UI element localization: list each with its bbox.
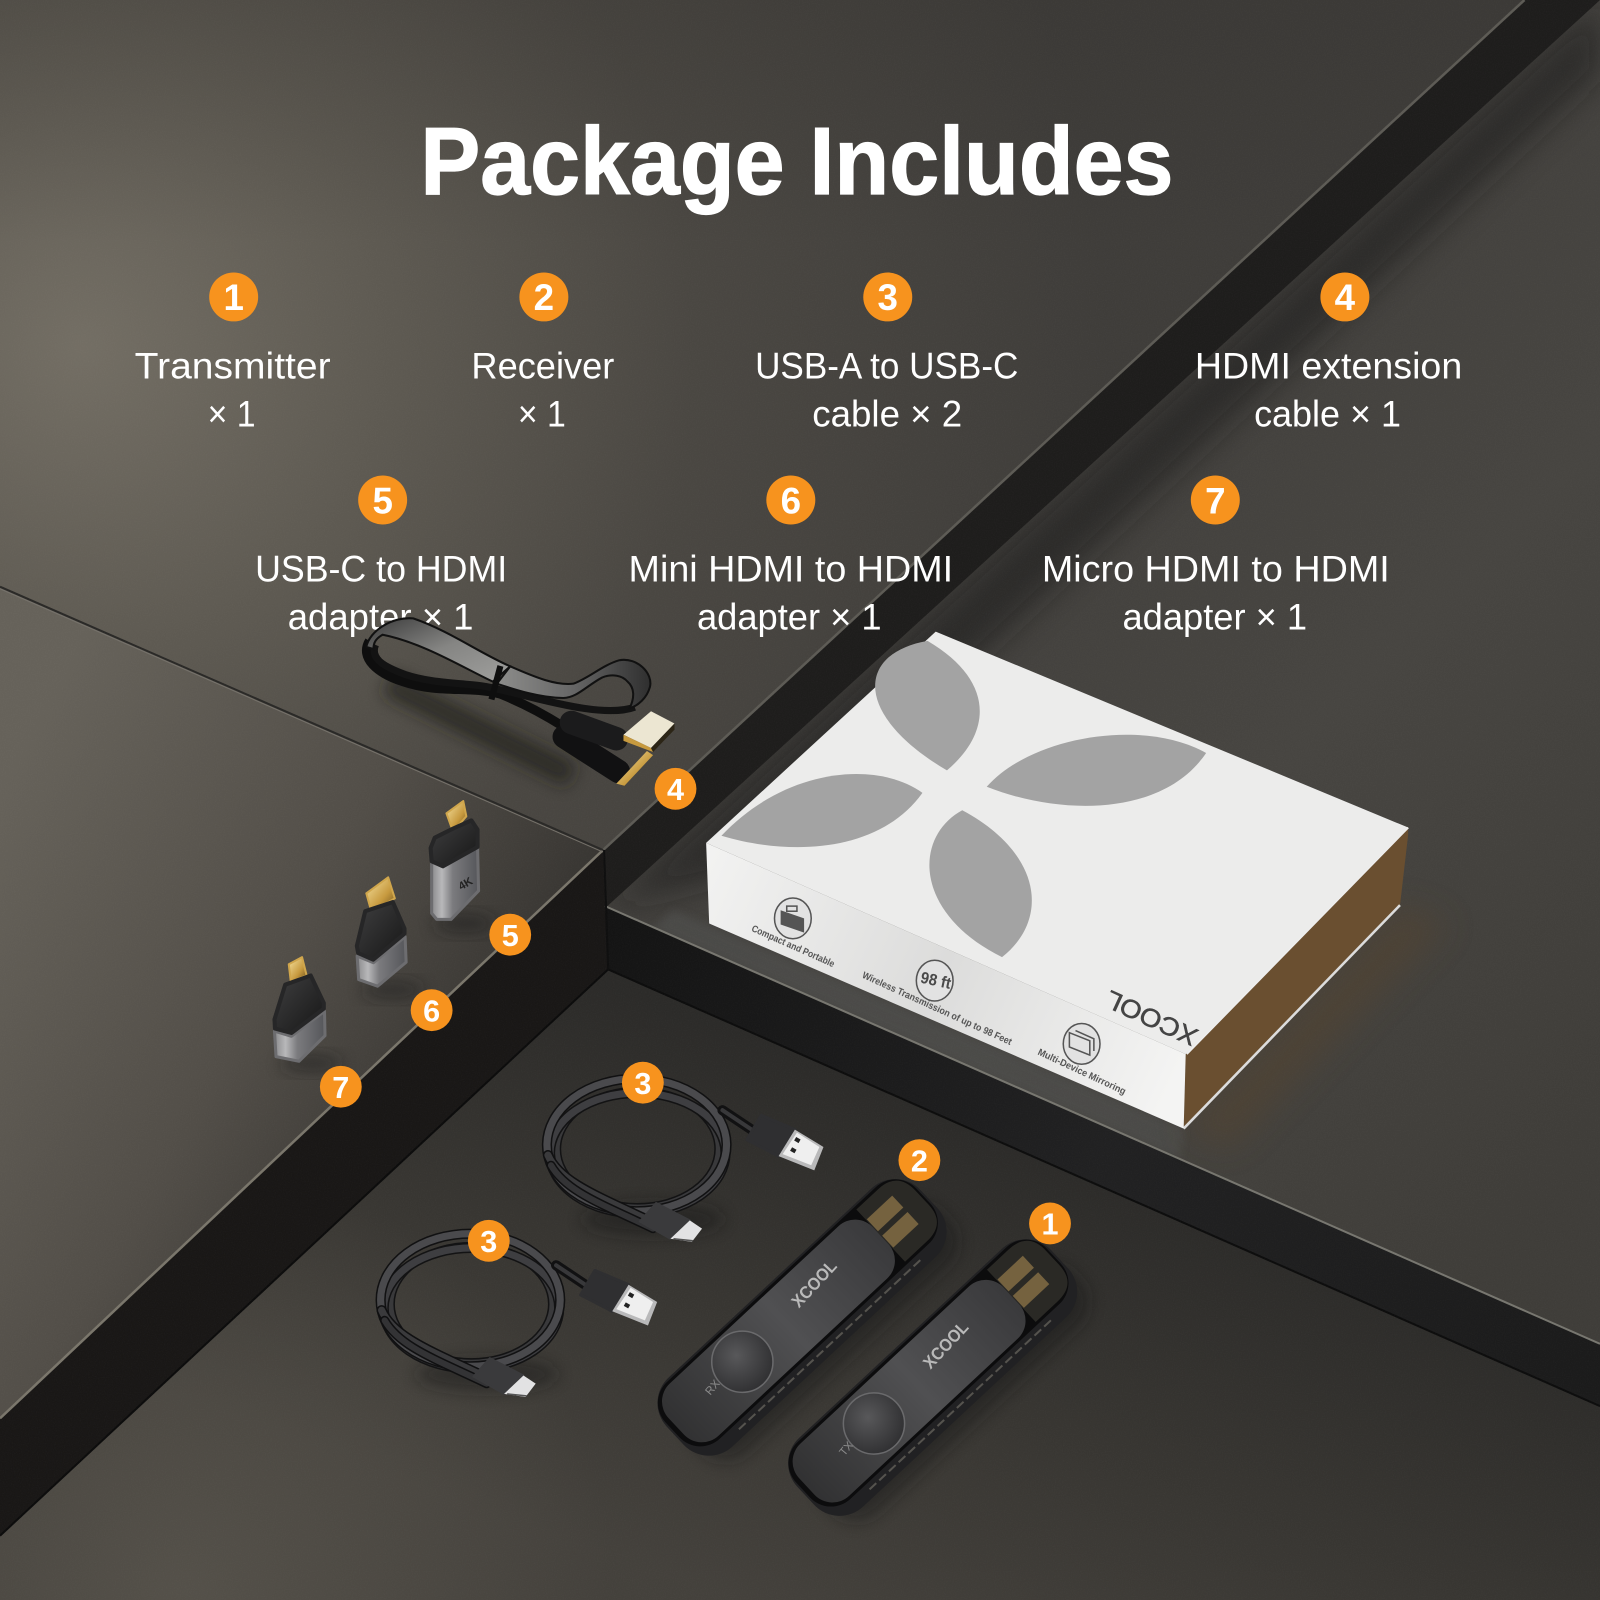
callout badge 7: 7	[332, 1071, 349, 1105]
callout badge 1	[1029, 1203, 1071, 1244]
petal left	[721, 774, 922, 847]
box top	[706, 632, 1408, 1054]
callout badge 2	[898, 1139, 940, 1181]
feature label: compact: Compact and Portable	[750, 923, 837, 970]
list item 5: adapter × 1	[288, 597, 473, 638]
callout badge 3 upper	[622, 1062, 664, 1104]
list item 1	[135, 272, 331, 435]
icon: 98 ft: 98 ft	[919, 969, 953, 993]
callout badge 4	[655, 768, 696, 810]
transmitter dongle	[774, 1225, 1101, 1541]
lower edge strands	[367, 641, 563, 727]
list item 1: 1	[223, 277, 244, 318]
transmitter dongle: TX	[837, 1439, 856, 1458]
list item 3: 3	[878, 277, 898, 318]
HDMI extension cable	[366, 618, 674, 786]
receiver dongle: XCOOL	[787, 1256, 841, 1311]
list item 2: × 1	[518, 394, 566, 435]
list item 1: Transmitter	[135, 346, 331, 387]
top darkening	[0, 0, 386, 58]
USB-C to HDMI adapter: 4K	[457, 875, 475, 893]
list item 2: Receiver	[471, 346, 614, 387]
upper plane	[0, 0, 804, 846]
band soft shadow	[605, 0, 1600, 908]
USB-A to USB-C cable upper	[547, 1079, 823, 1242]
list item 3: cable × 2	[812, 394, 962, 435]
list item 5: USB-C to HDMI	[255, 549, 507, 590]
callout badge 6	[411, 989, 453, 1031]
HDMI male connector	[571, 722, 616, 739]
edge lines	[0, 850, 603, 1418]
icon: multi-device	[1063, 1023, 1100, 1064]
product box	[706, 632, 1449, 1148]
list item 3: USB-A to USB-C	[755, 346, 1018, 387]
box side	[1184, 828, 1408, 1129]
icon: 98 ft	[916, 960, 953, 1001]
lit strip in front of box	[653, 910, 1184, 1159]
list item 6	[629, 476, 953, 638]
list item 7: Micro HDMI to HDMI	[1042, 549, 1390, 590]
USB-C to HDMI adapter	[431, 801, 495, 933]
transmitter dongle: XCOOL	[919, 1317, 973, 1373]
callout badge 3 lower	[468, 1220, 510, 1262]
petal top	[875, 641, 980, 770]
list item 2: 2	[534, 277, 554, 318]
box front	[706, 843, 1186, 1129]
Micro HDMI to HDMI adapter	[274, 957, 342, 1071]
box warm glow	[1184, 905, 1449, 1148]
list item 2	[471, 272, 614, 435]
callout badge 7	[320, 1066, 362, 1108]
ribbon upper left	[366, 618, 510, 682]
cable tie	[488, 665, 503, 700]
list item 5	[255, 476, 507, 638]
list item 6: adapter × 1	[697, 597, 882, 638]
Mini HDMI to HDMI adapter	[357, 877, 423, 998]
lower left plane	[0, 587, 603, 1418]
list item 5: 5	[372, 480, 393, 521]
callout badge 5	[489, 914, 531, 956]
receiver dongle	[643, 1165, 971, 1480]
left step face	[0, 850, 608, 1536]
list item 4	[1195, 272, 1462, 435]
floor light lower left	[0, 1362, 397, 1600]
list item 1: × 1	[208, 394, 256, 435]
callout badge 5: 5	[502, 919, 519, 953]
callout badge 2: 2	[911, 1144, 928, 1178]
floor	[336, 970, 1600, 1600]
list item 3	[755, 272, 1018, 435]
title: Package Includes	[420, 108, 1173, 215]
feature label: range: Wireless Transmission of up to 98 Feet	[860, 970, 1014, 1048]
list item 4: HDMI extension	[1195, 346, 1462, 387]
feature label: mirroring: Multi-Device Mirroring	[1036, 1047, 1128, 1098]
HDMI female connector	[564, 737, 618, 771]
USB-A to USB-C cable lower	[381, 1234, 657, 1397]
cable shadow	[388, 684, 571, 776]
list item 4: cable × 1	[1254, 394, 1401, 435]
box logo: XCOOL	[1101, 984, 1202, 1051]
list item 6: 6	[781, 480, 801, 521]
list item 7	[1042, 476, 1390, 638]
right front face	[605, 906, 1600, 1406]
callout badge 6: 6	[423, 994, 440, 1028]
callout badge 4: 4	[667, 773, 684, 807]
icon: briefcase	[774, 898, 811, 939]
receiver dongle: RX	[703, 1378, 723, 1398]
list item 6: Mini HDMI to HDMI	[629, 549, 953, 590]
list item 7: adapter × 1	[1122, 597, 1307, 638]
callout badge 3 upper: 3	[634, 1067, 651, 1101]
ribbon right loop	[497, 660, 650, 708]
diagonal dark band	[603, 0, 1600, 908]
callout badge 3 lower: 3	[480, 1225, 497, 1259]
petal bottom	[929, 810, 1032, 957]
right raised plane	[605, 0, 1600, 1344]
list item 4: 4	[1335, 277, 1356, 318]
callout badge 1: 1	[1041, 1208, 1059, 1242]
petal right	[987, 735, 1206, 806]
list item 7: 7	[1205, 480, 1226, 521]
